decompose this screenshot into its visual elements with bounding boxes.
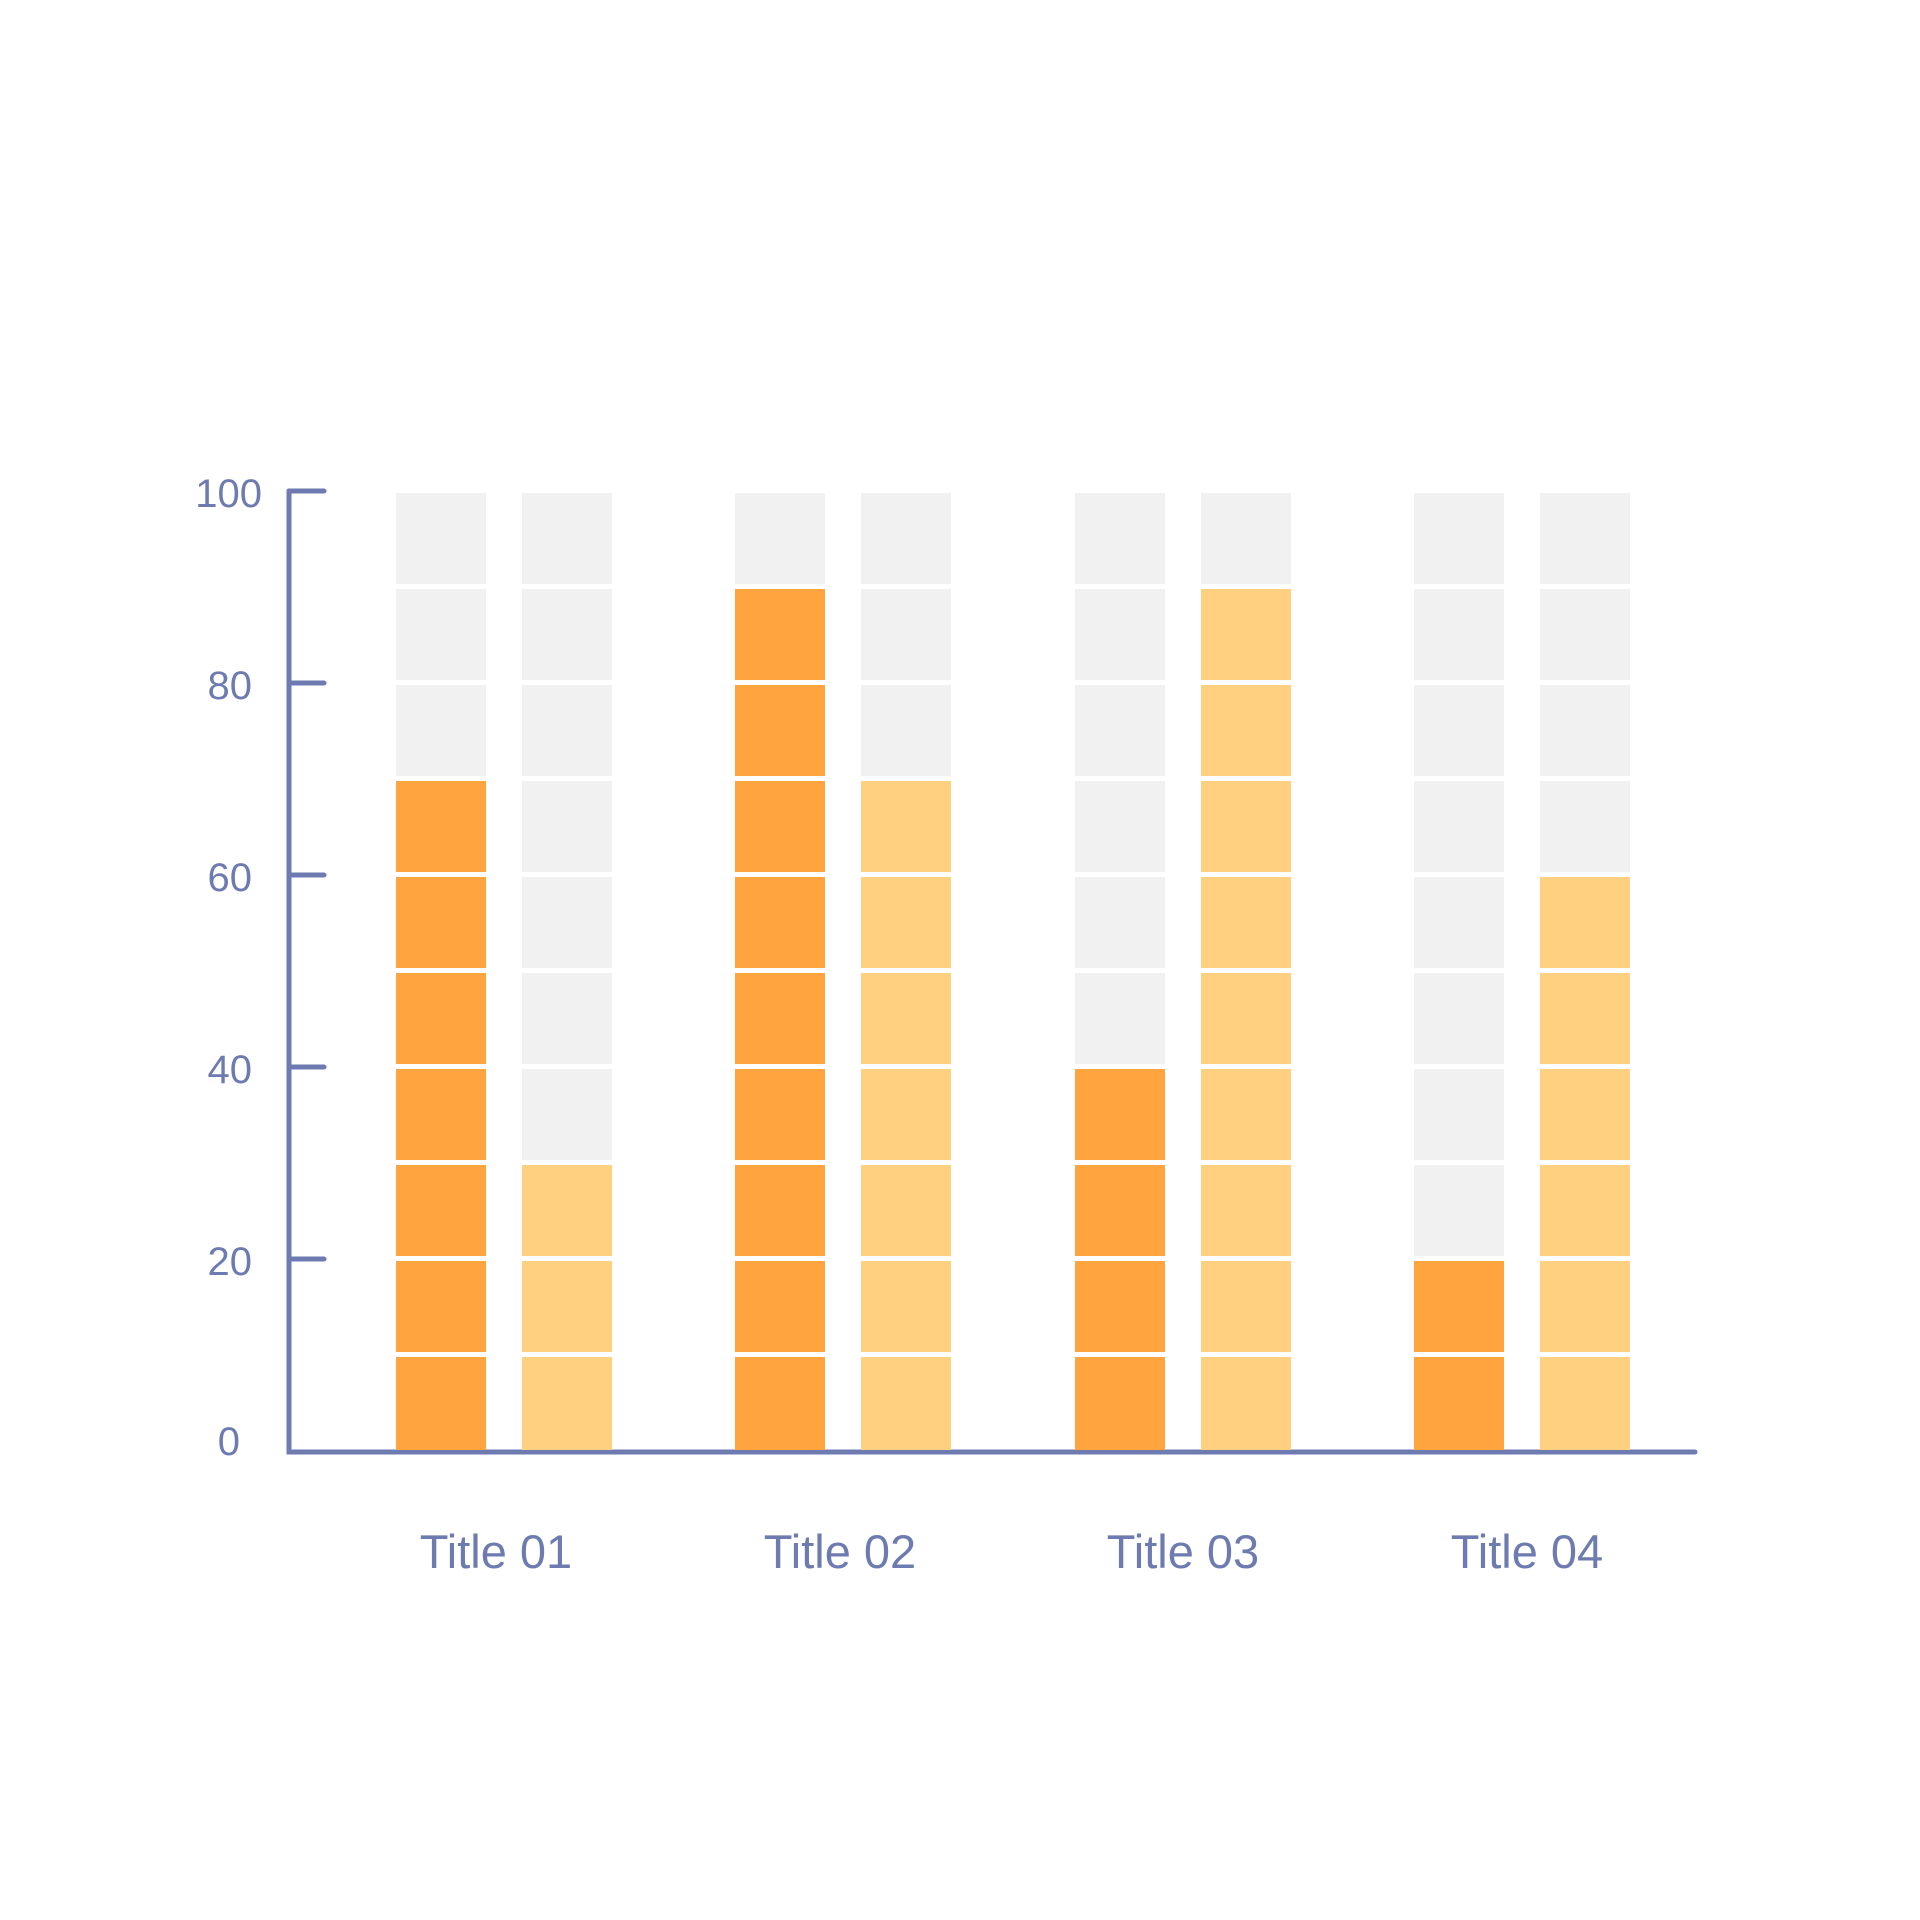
group: Title 01: [396, 493, 612, 1578]
axes: [289, 491, 1695, 1452]
y axis labels: 20: [208, 1240, 252, 1284]
y axis labels: 80: [208, 664, 252, 708]
group: Title 03: Title 03: [1107, 1525, 1259, 1578]
group: Title 02: Title 02: [764, 1525, 916, 1578]
group: Title 02: [735, 493, 951, 1578]
y axis labels: [195, 472, 262, 1464]
y axis labels: 60: [208, 856, 252, 900]
y axis labels: 0: [218, 1420, 240, 1464]
group: Title 04: Title 04: [1451, 1525, 1603, 1578]
y axis labels: 100: [195, 472, 262, 516]
group: Title 04: [1414, 493, 1630, 1578]
y axis labels: 40: [208, 1048, 252, 1092]
group: Title 03: [1075, 493, 1291, 1578]
group: Title 01: Title 01: [420, 1525, 572, 1578]
